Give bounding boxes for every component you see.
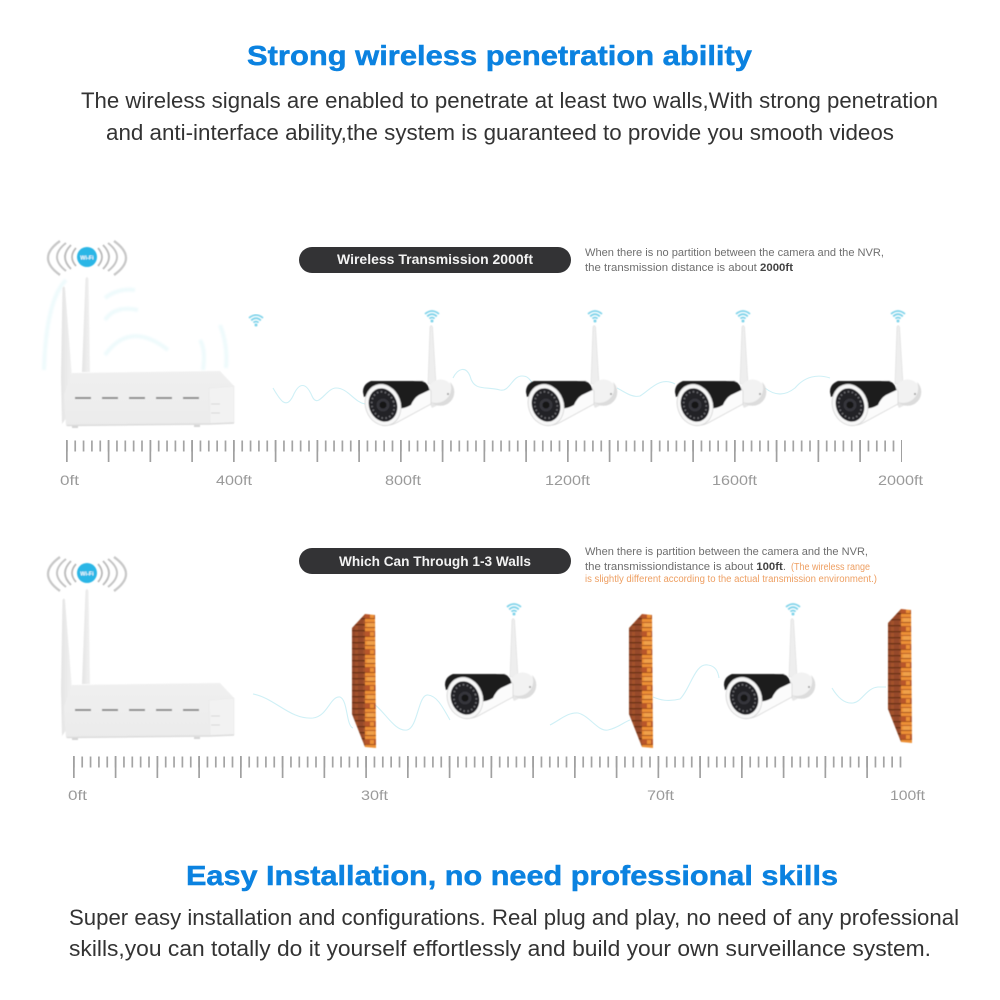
panel: wireless transmission 2000ft (44, 241, 923, 488)
ruler labels: 70ft (647, 787, 674, 803)
text block: wireless intro: The wireless signals are enabled to penetrate at least two walls,With strong penetration (81, 88, 938, 113)
icon: router (61, 277, 234, 428)
text block: partition note (585, 546, 877, 585)
camera 1 with wifi (441, 604, 536, 724)
wall 2 (629, 614, 653, 748)
ruler labels (60, 472, 923, 488)
text block: no partition note (585, 247, 884, 274)
ruler labels: 2000ft (878, 472, 923, 488)
icon: wifi badge (48, 241, 126, 275)
ruler labels: 800ft (385, 472, 421, 488)
wall 1 (352, 614, 376, 748)
pill heading: Which Can Through 1-3 Walls (299, 548, 571, 574)
camera 4 with wifi (826, 311, 921, 431)
distance ruler 2000ft (66, 446, 902, 451)
pill heading: Which Can Through 1-3 Walls: Which Can Through 1-3 Walls (339, 554, 531, 569)
ruler labels: 100ft (890, 787, 925, 803)
text block: installation: skills,you can totally do it yourself effortlessly and build your own surveillance system. (69, 936, 931, 961)
ruler labels: 0ft (68, 787, 87, 803)
text block: no partition note: When there is no partition between the camera and the NVR, (585, 247, 884, 259)
ruler labels: 1200ft (545, 472, 590, 488)
ruler labels: 30ft (361, 787, 388, 803)
pill heading: Wireless Transmission 2000ft: Wireless Transmission 2000ft (337, 252, 534, 267)
camera 3 with wifi (671, 311, 766, 431)
text block: installation: Super easy installation and configurations. Real plug and play, no need of any professional (69, 905, 959, 930)
ruler labels: 0ft (60, 472, 79, 488)
ruler labels: 400ft (216, 472, 252, 488)
text block: partition note: (The wireless range (791, 562, 870, 573)
text block: wireless intro: and anti-interface ability,the system is guaranteed to provide you smooth videos (106, 120, 894, 145)
camera 2 with wifi (720, 604, 815, 724)
wall 3 (888, 609, 912, 743)
camera 1 with wifi (359, 311, 454, 431)
icon: small wifi signal (249, 315, 263, 326)
icon: wifi badge (48, 557, 126, 591)
pill heading: Wireless Transmission 2000ft (299, 247, 571, 273)
camera 2 with wifi (522, 311, 617, 431)
icon: router (61, 589, 234, 740)
icon: wifi badge: Wi-Fi (80, 572, 94, 578)
text block: partition note: When there is partition between the camera and the NVR, (585, 546, 868, 558)
text block: installation (69, 905, 959, 961)
panel: through 1-3 walls (48, 546, 925, 803)
text block: partition note: is slightly different according to the actual transmission environment.) (585, 574, 877, 585)
text block: partition note: the transmissiondistance is about 100ft. (585, 561, 786, 573)
ruler labels (68, 787, 925, 803)
signal waves (273, 369, 830, 404)
text block: no partition note: the transmission distance is about 2000ft (585, 262, 793, 274)
title: Easy Installation: Easy Installation, no need professional skills (186, 860, 838, 891)
distance ruler 100ft (73, 762, 908, 767)
ruler labels: 1600ft (712, 472, 757, 488)
icon: wifi badge: Wi-Fi (80, 256, 94, 262)
faint signal arcs behind router (44, 280, 226, 370)
text block: wireless intro (81, 88, 938, 145)
signal waves (253, 665, 886, 730)
title: Strong wireless penetration ability: Strong wireless penetration ability (247, 40, 752, 71)
